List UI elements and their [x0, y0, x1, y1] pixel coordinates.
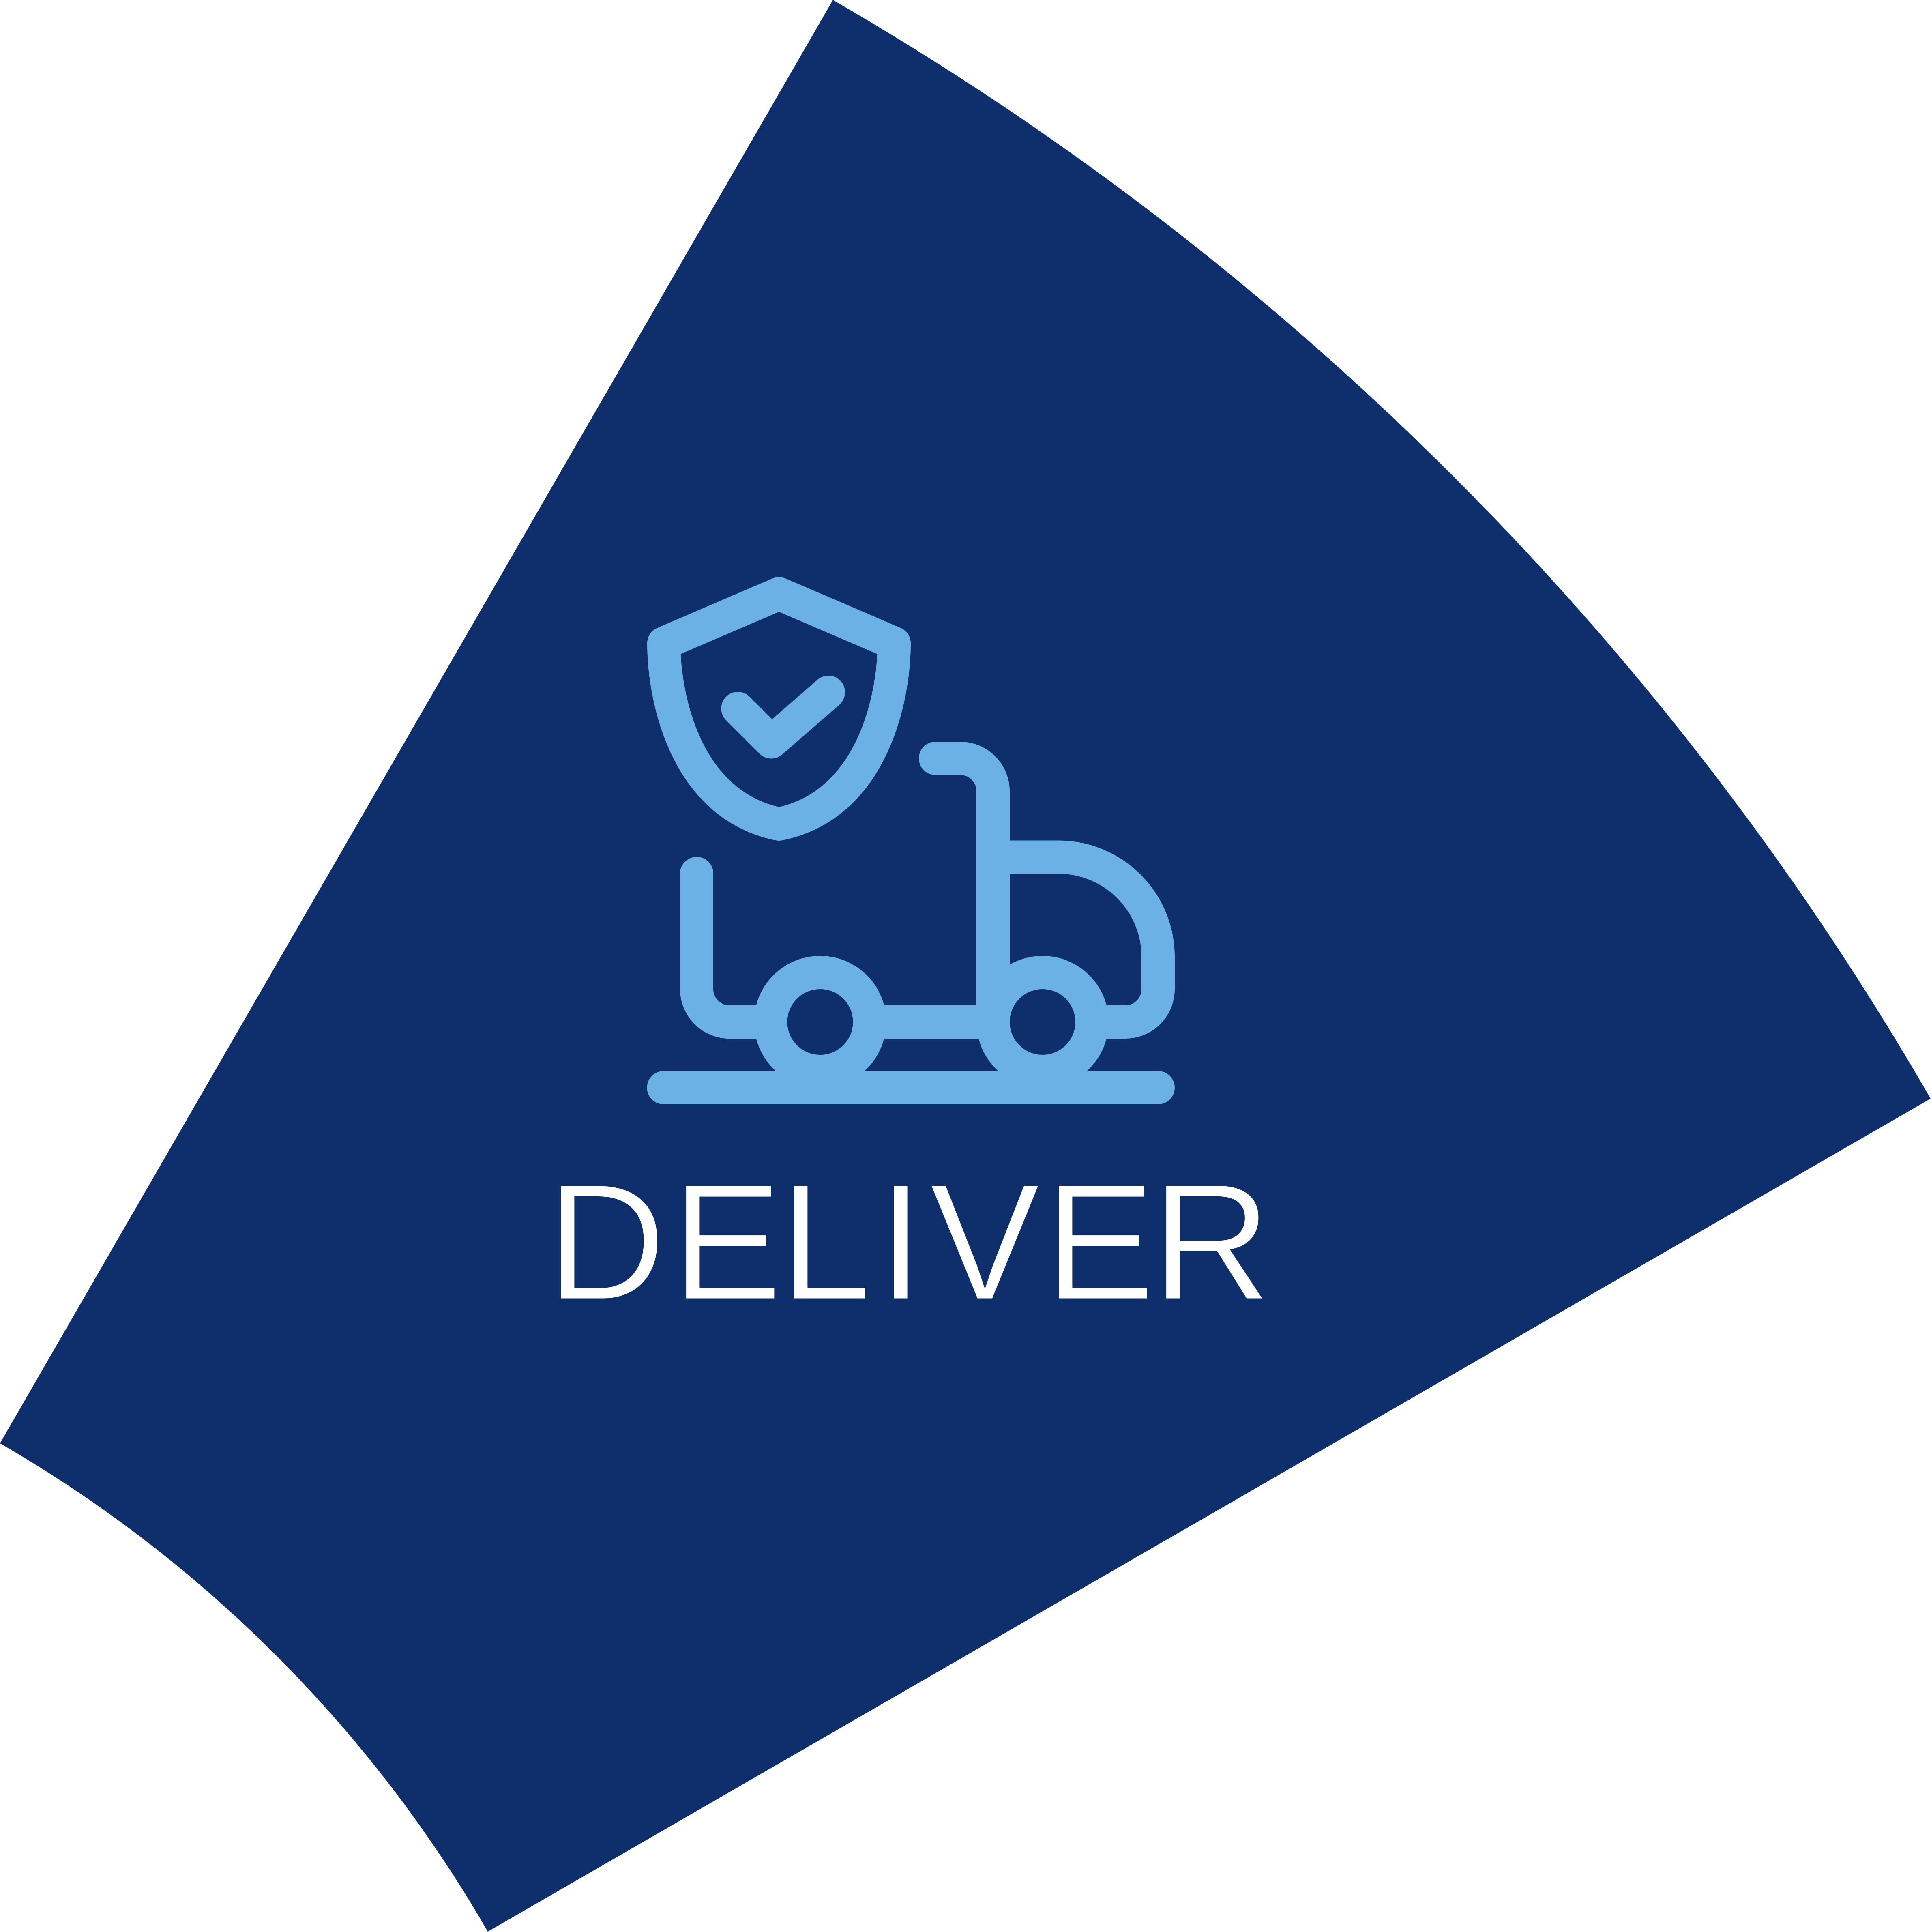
- icon: shield outline: [664, 594, 894, 824]
- heading: deliver: DELIVER: [546, 1149, 1272, 1335]
- icon: ground line: [663, 1071, 1158, 1104]
- icon: truck body and cab: [697, 857, 1158, 1022]
- icon: rear wheel: [770, 972, 869, 1071]
- icon: truck mast: [935, 758, 993, 1022]
- icon: front wheel: [993, 972, 1092, 1071]
- icon: delivery truck with shield: [663, 594, 1158, 1088]
- icon: check mark: [738, 692, 828, 742]
